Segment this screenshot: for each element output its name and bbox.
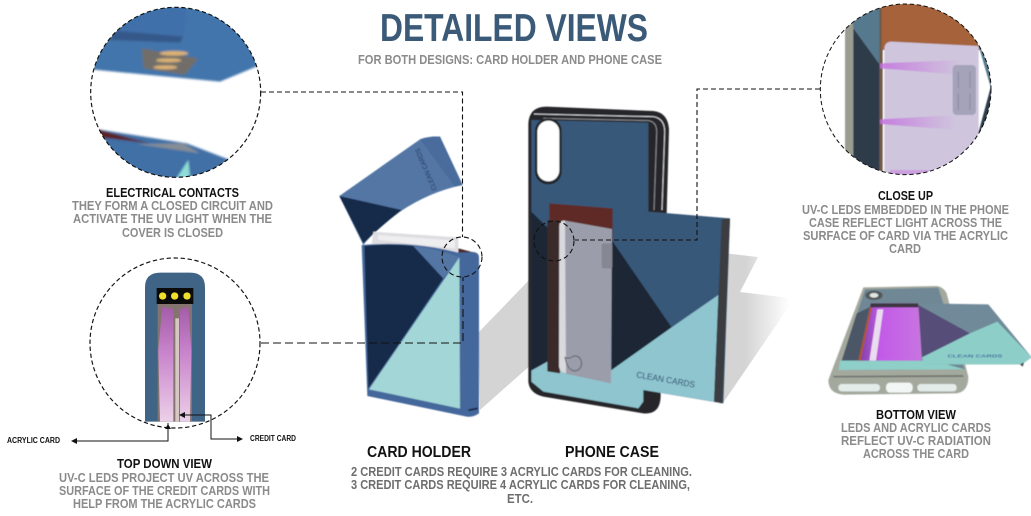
- phone blue back: [531, 120, 730, 403]
- phone navy triangles: [531, 212, 548, 370]
- yellow leds: [159, 292, 191, 300]
- holder top section: [145, 273, 205, 422]
- sliding cover: [918, 303, 1031, 364]
- text block: electrical contacts: [72, 186, 273, 240]
- product: phone case: [528, 107, 730, 413]
- white cards inside holder: [372, 232, 458, 253]
- lid brand text: CLEAN CARDS: [414, 147, 439, 191]
- card slot brown: [549, 203, 613, 240]
- small ring on holder: [442, 237, 482, 277]
- phone teal panel: [531, 295, 718, 408]
- text block: electrical contacts: COVER IS CLOSED: [122, 226, 223, 240]
- phone back: [839, 288, 965, 370]
- cover dark triangle: [918, 305, 970, 357]
- silver card: [559, 221, 612, 383]
- text block: top down view: [59, 457, 270, 511]
- text block: cleaning note: ETC.: [507, 492, 533, 506]
- uv light channels: [158, 307, 173, 422]
- product label: card holder: CARD HOLDER: [367, 444, 471, 461]
- phone shell: [828, 286, 968, 395]
- text block: close up: CLOSE UP: [878, 189, 933, 203]
- text block: top down view: SURFACE OF THE CREDIT CARDS WITH: [59, 484, 270, 498]
- circle: electrical contacts: [90, 6, 262, 178]
- holder body: [362, 244, 479, 417]
- cover brand text: CLEAN CARDS: [947, 354, 1003, 360]
- dashed ring: [820, 4, 991, 175]
- led strip: [157, 288, 193, 304]
- text block: top down view: HELP FROM THE ACRYLIC CARDS: [73, 497, 256, 511]
- text block: top down view: UV-C LEDS PROJECT UV ACROSS THE: [59, 471, 269, 485]
- text block: cleaning note: 2 CREDIT CARDS REQUIRE 3 ACRYLIC CARDS FOR CLEANING.: [351, 465, 692, 479]
- holder front navy panel: [364, 245, 443, 388]
- text block: bottom view: ACROSS THE CARD: [863, 447, 969, 461]
- text block: close up: SURFACE OF CARD VIA THE ACRYLIC: [803, 229, 1008, 243]
- text block: close up: CARD: [889, 242, 921, 256]
- circle: top down view: [90, 258, 260, 428]
- arrow: credit card: [179, 412, 243, 442]
- text block: bottom view: LEDS AND ACRYLIC CARDS: [841, 421, 991, 435]
- cover teal panel: [922, 322, 1031, 364]
- text block: close up: UV-C LEDS EMBEDDED IN THE PHONE: [802, 203, 1009, 217]
- text block: close up: CASE REFLECT LIGHT ACROSS THE: [809, 216, 1002, 230]
- holder front teal panel: [369, 257, 460, 409]
- subtitle: FOR BOTH DESIGNS: CARD HOLDER AND PHONE CASE: [358, 53, 662, 67]
- contacts detail image: [94, 7, 257, 178]
- text block: bottom view: REFLECT UV-C RADIATION: [841, 434, 991, 448]
- text block: electrical contacts: ACTIVATE THE UV LIGHT WHEN THE: [73, 212, 272, 226]
- connector: contacts to holder: [261, 92, 462, 237]
- text block: cleaning note: 3 CREDIT CARDS REQUIRE 4 ACRYLIC CARDS FOR CLEANING,: [351, 478, 690, 492]
- label: credit card: CREDIT CARD: [250, 434, 296, 443]
- drop shadows behind products: [478, 253, 790, 410]
- product: bottom view phone: [828, 286, 1031, 395]
- connector: top down to holder: [261, 277, 463, 343]
- product: card holder: [339, 137, 479, 417]
- text block: electrical contacts: ELECTRICAL CONTACTS: [106, 186, 239, 200]
- text block: bottom view: BOTTOM VIEW: [876, 408, 956, 422]
- uv glowing slot: [858, 303, 922, 361]
- text block: cleaning note: [351, 465, 692, 506]
- holder front blue triangle: [413, 246, 459, 278]
- phone outer shell: [528, 107, 669, 413]
- product label: phone case: PHONE CASE: [565, 444, 659, 461]
- text block: bottom view: [841, 408, 991, 461]
- text block: close up: [802, 189, 1009, 256]
- connector: close up to phone: [575, 89, 820, 240]
- camera cutout: [535, 118, 562, 184]
- arrow: acrylic card: [71, 423, 171, 444]
- dashed ring: [90, 258, 260, 428]
- text block: top down view: TOP DOWN VIEW: [117, 457, 212, 471]
- brand text on flap: CLEAN CARDS: [636, 369, 696, 390]
- title: DETAILED VIEWS: [380, 7, 648, 50]
- close up image: [845, 0, 997, 180]
- holder lid: [339, 137, 463, 245]
- text block: electrical contacts: THEY FORM A CLOSED CIRCUIT AND: [72, 199, 273, 213]
- dashed ring: [91, 7, 261, 177]
- flap dark edge: [714, 218, 730, 403]
- label: acrylic card: ACRYLIC CARD: [7, 436, 60, 445]
- small ring on phone: [534, 221, 574, 261]
- circle: close up: [820, 0, 997, 180]
